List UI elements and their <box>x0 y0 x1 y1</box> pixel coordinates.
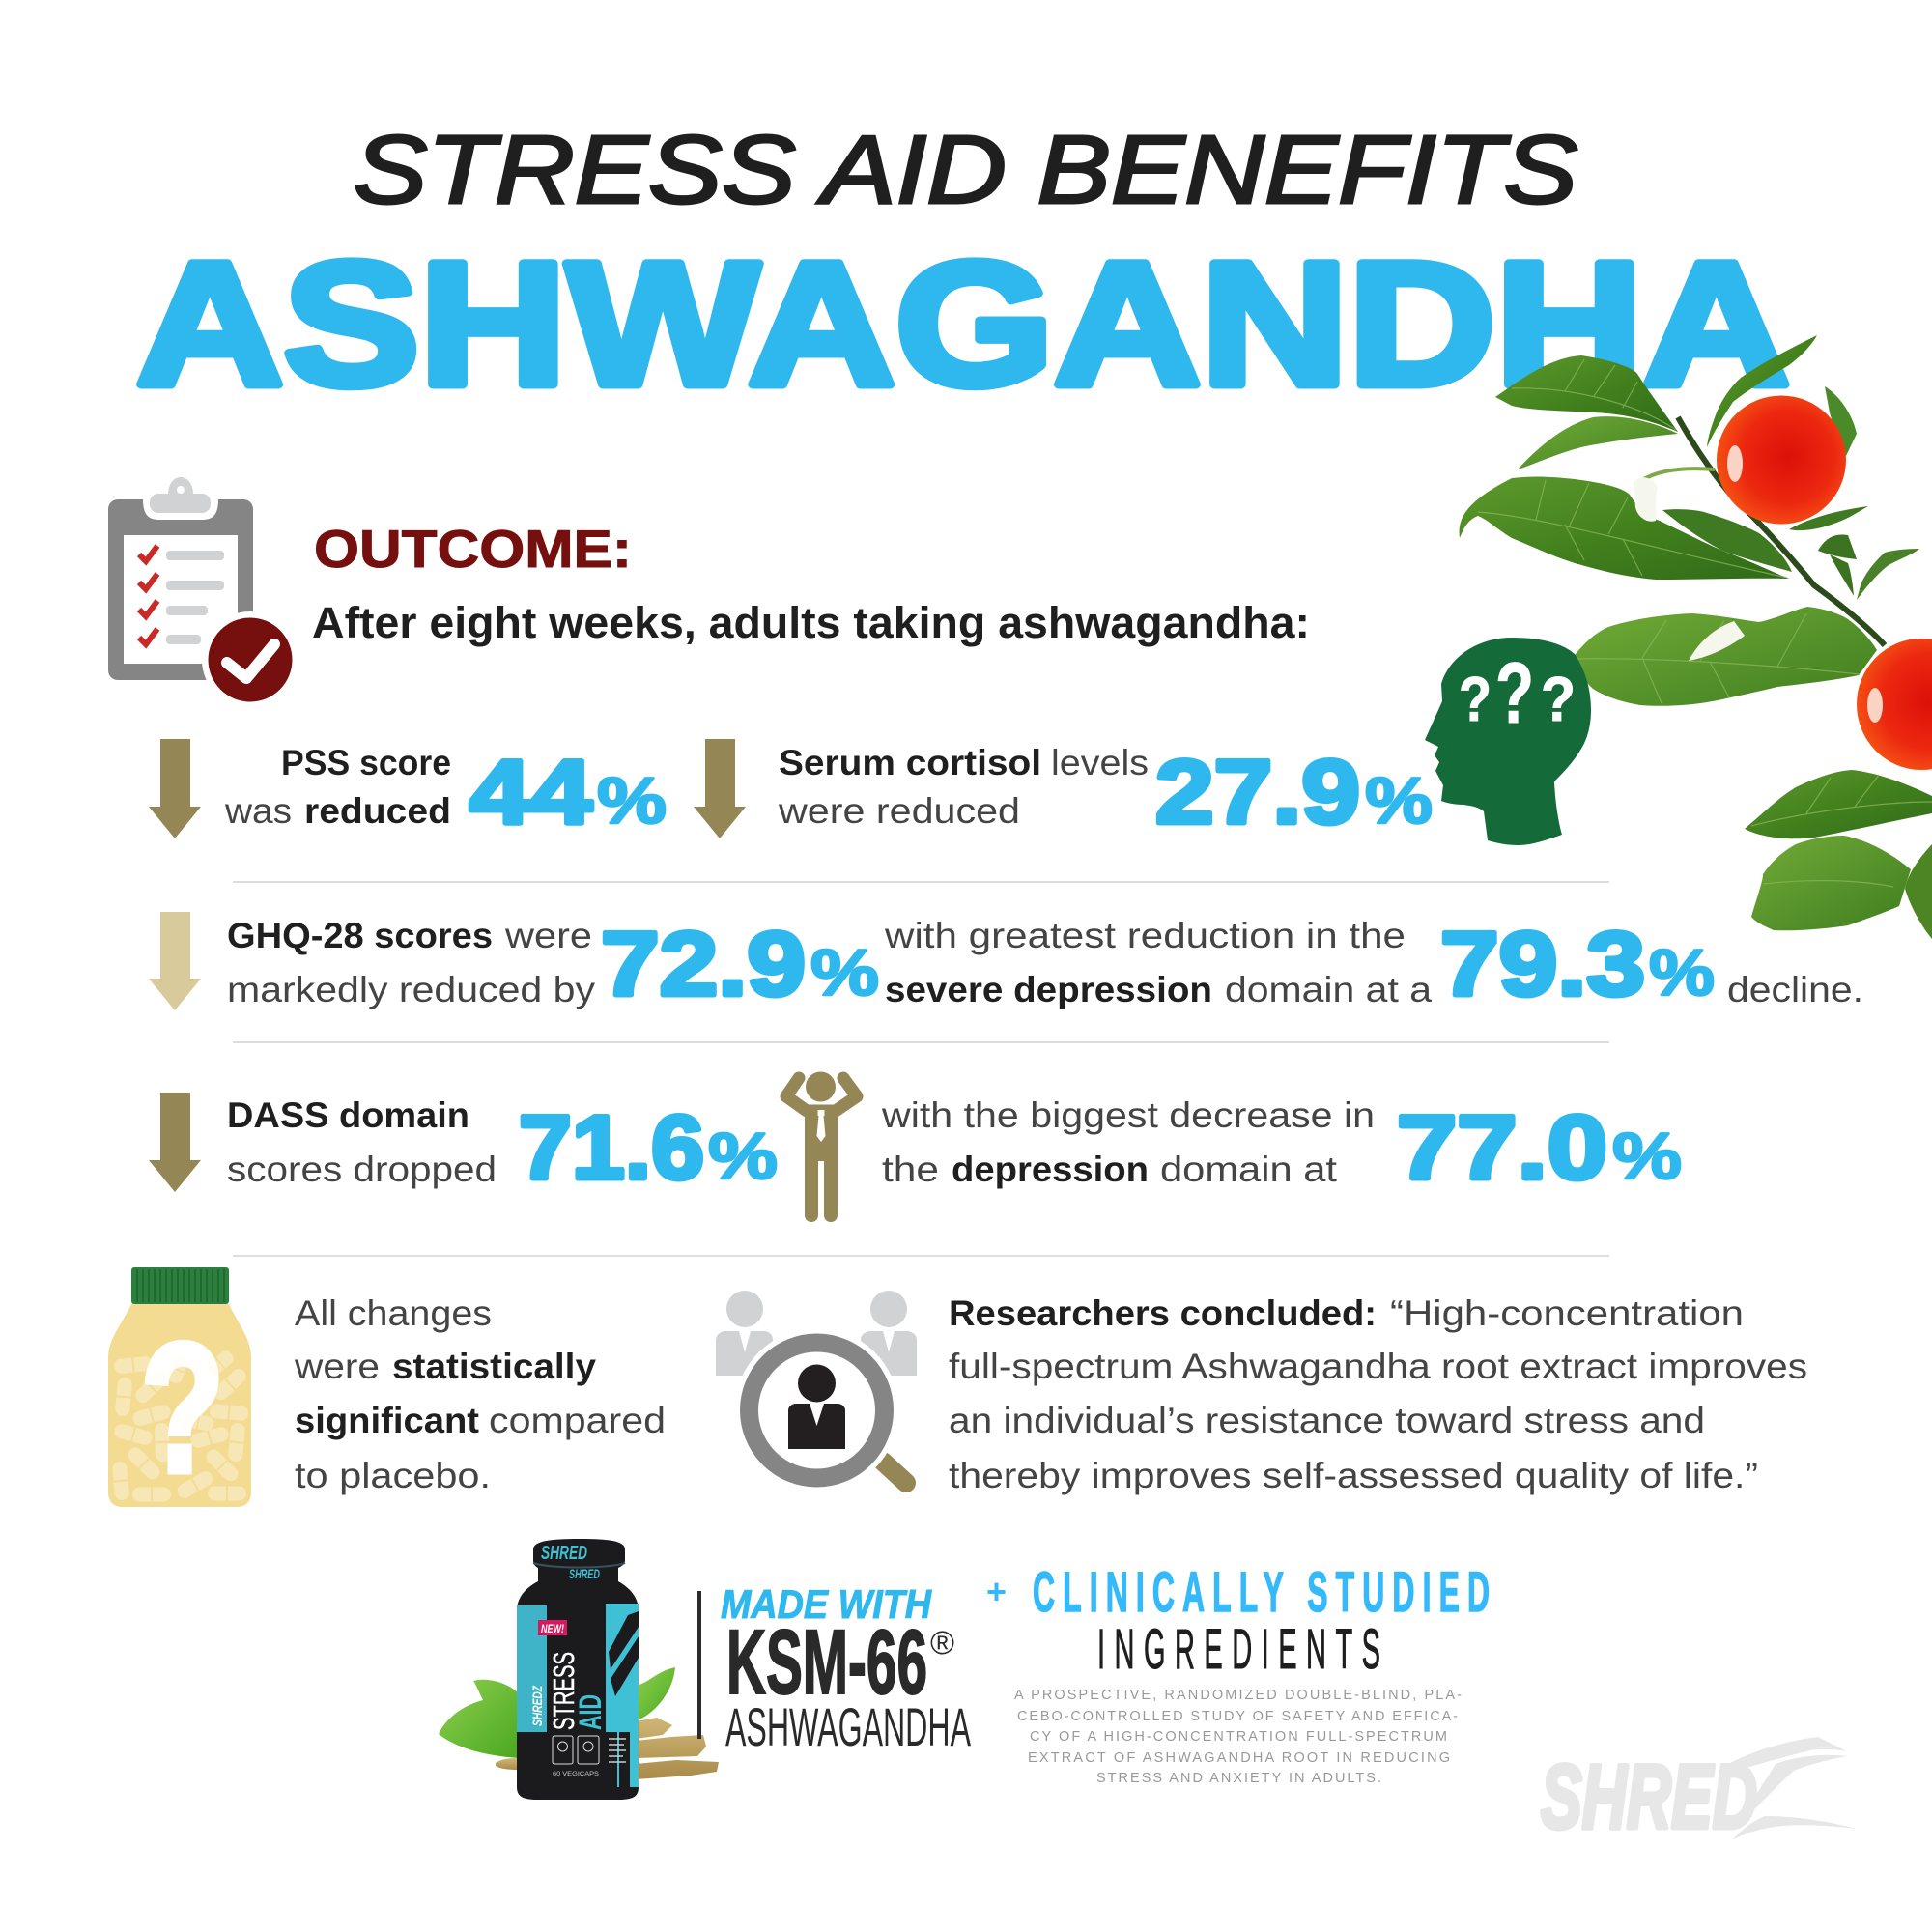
heading: clinically studied ingredients: + <box>986 1572 1007 1611</box>
product: stress aid bottle: SHRED <box>569 1566 600 1581</box>
heading: clinically studied ingredients: CLINICALLY STUDIED <box>1033 1561 1490 1623</box>
text: study citation: CEBO-CONTROLLED STUDY OF SAFETY AND EFFICA- <box>1017 1709 1458 1724</box>
stat: GHQ-28: decline. <box>1727 970 1863 1009</box>
stat: serum cortisol: 27.9 <box>1155 741 1360 842</box>
text: study citation <box>1014 1688 1462 1786</box>
stat: GHQ-28: 72.9 <box>601 913 806 1014</box>
text: researchers concluded: full-spectrum Ashwagandha root extract improves <box>949 1347 1807 1386</box>
stat: GHQ-28: markedly reduced by <box>227 970 596 1009</box>
label: made with KSM-66: MADE WITH <box>721 1581 932 1627</box>
text: study citation: EXTRACT OF ASHWAGANDHA ROOT IN REDUCING <box>1028 1750 1450 1766</box>
text: study citation: STRESS AND ANXIETY IN ADULTS. <box>1096 1771 1381 1786</box>
icon: head with question marks: ? <box>1541 664 1576 734</box>
icon: placebo bottle <box>108 1267 251 1511</box>
illustration: ashwagandha plant branch <box>1460 335 1932 939</box>
icon: clipboard with check badge <box>108 477 298 708</box>
stat: PSS score: 44 <box>469 741 592 842</box>
stat: biggest decrease: with the biggest decrease in <box>881 1095 1375 1135</box>
text: statistically significant: compared <box>489 1401 666 1440</box>
icon: down arrow PSS <box>149 739 201 838</box>
stat: serum cortisol: % <box>1365 764 1433 838</box>
heading: clinically studied ingredients: INGREDIENTS <box>1097 1617 1380 1681</box>
stat: biggest decrease: domain at <box>1160 1150 1338 1189</box>
title: stress aid benefits: STRESS AID BENEFITS <box>354 116 1577 224</box>
stat: PSS score: PSS score <box>281 743 451 782</box>
text: statistically significant: significant <box>295 1401 479 1440</box>
subheading: after eight weeks: After eight weeks, adults taking ashwagandha: <box>312 598 1310 647</box>
stat: GHQ-28: 79.3 <box>1440 913 1645 1014</box>
stat: GHQ-28: were <box>504 916 592 955</box>
stat: biggest decrease: the <box>882 1150 939 1189</box>
stat: GHQ-28: GHQ-28 scores <box>227 916 493 955</box>
text: researchers concluded: thereby improves self-assessed quality of life.” <box>949 1456 1758 1495</box>
stat: GHQ-28: with greatest reduction in the <box>884 916 1406 955</box>
red berry <box>1857 639 1932 770</box>
flower bud <box>1634 477 1658 522</box>
icon: down arrow cortisol <box>694 739 746 838</box>
icon: head with question marks: ? <box>1459 664 1492 734</box>
text: study citation: A PROSPECTIVE, RANDOMIZED DOUBLE-BLIND, PLA- <box>1014 1688 1462 1703</box>
roots and leaves <box>439 1667 719 1779</box>
icon: placebo bottle: ? <box>141 1306 224 1511</box>
stat: DASS domain: DASS domain <box>227 1095 469 1135</box>
stat: serum cortisol: Serum cortisol <box>779 743 1041 782</box>
text: researchers concluded: “High-concentration <box>1390 1293 1744 1333</box>
divider bar <box>697 1591 701 1739</box>
stat: GHQ-28: % <box>1649 936 1715 1009</box>
product: stress aid bottle: NEW! <box>541 1622 564 1635</box>
product: stress aid bottle: 60 VEGICAPS <box>553 1772 599 1777</box>
title: ashwagandha: ASHWAGANDHA <box>136 225 1790 422</box>
stat: PSS score <box>224 741 667 842</box>
text: statistically significant: statistically <box>392 1347 596 1386</box>
text: statistically significant: to placebo. <box>295 1456 491 1495</box>
label: made with KSM-66 <box>721 1581 971 1757</box>
stat: biggest decrease: depression <box>952 1150 1149 1189</box>
text: statistically significant: were <box>294 1347 380 1386</box>
text: study citation: CY OF A HIGH-CONCENTRATION FULL-SPECTRUM <box>1030 1729 1447 1745</box>
product: stress aid bottle: AID <box>573 1694 608 1730</box>
label: made with KSM-66: ASHWAGANDHA <box>725 1696 971 1757</box>
stat: PSS score: % <box>597 764 667 838</box>
stat: serum cortisol: levels <box>1051 743 1149 782</box>
text: statistically significant <box>294 1293 666 1495</box>
stat: biggest decrease: 77.0 <box>1397 1096 1607 1198</box>
product: stress aid bottle: SHREDZ <box>529 1686 545 1726</box>
stat: PSS score: was <box>224 791 292 831</box>
flower bud <box>1689 621 1745 661</box>
icon: stressed man holding head <box>786 1072 857 1222</box>
text: researchers concluded: Researchers concluded: <box>949 1293 1377 1333</box>
stat: serum cortisol <box>778 741 1433 842</box>
stat: DASS domain <box>227 1095 778 1198</box>
stat: DASS domain: 71.6 <box>519 1096 704 1198</box>
icon: head with question marks <box>1425 638 1591 845</box>
label: made with KSM-66: ® <box>930 1625 954 1662</box>
red berry <box>1717 396 1846 524</box>
heading: outcome: OUTCOME: <box>314 519 632 579</box>
icon: down arrow DASS <box>149 1093 201 1192</box>
stat: PSS score: reduced <box>304 791 451 831</box>
stat: serum cortisol: were reduced <box>778 791 1020 831</box>
product: stress aid bottle <box>439 1539 719 1800</box>
stat: biggest decrease <box>881 1095 1682 1198</box>
stat: biggest decrease: % <box>1612 1120 1682 1193</box>
icon: head with question marks: ? <box>1495 644 1534 741</box>
icon: light down arrow GHQ <box>149 912 201 1010</box>
stat: GHQ-28 <box>227 913 1863 1014</box>
icon: researchers under magnifier <box>716 1291 917 1492</box>
text: researchers concluded: an individual’s resistance toward stress and <box>949 1401 1705 1440</box>
stat: GHQ-28: severe depression <box>885 970 1212 1009</box>
label: made with KSM-66: KSM-66 <box>726 1611 927 1714</box>
stat: GHQ-28: domain at a <box>1225 970 1432 1009</box>
product: stress aid bottle: SHRED <box>541 1543 587 1564</box>
logo: shredz watermark: SHRED <box>1541 1746 1757 1847</box>
icon: placebo bottle: ? <box>141 1306 224 1511</box>
product: stress aid bottle: STRESS <box>547 1652 581 1730</box>
stat: GHQ-28: % <box>810 936 879 1009</box>
heading: clinically studied ingredients <box>986 1561 1490 1681</box>
stat: DASS domain: scores dropped <box>227 1150 497 1189</box>
text: statistically significant: All changes <box>295 1293 492 1333</box>
stat: DASS domain: % <box>708 1120 778 1193</box>
text: researchers concluded <box>949 1293 1807 1495</box>
